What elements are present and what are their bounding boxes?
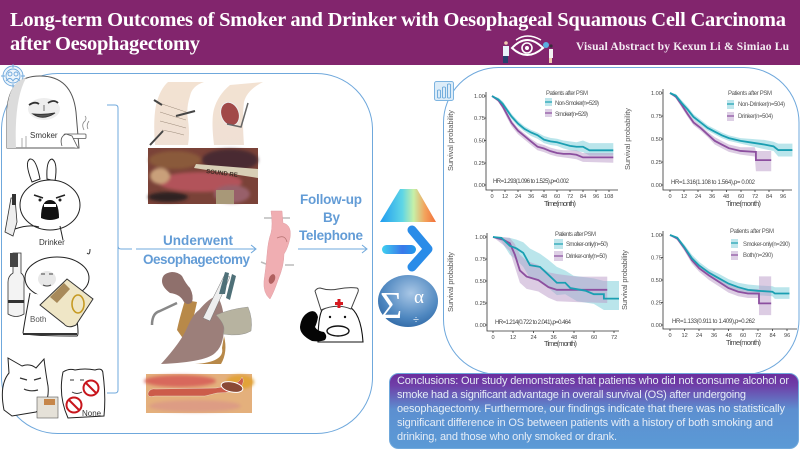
panel: methods <box>1 64 372 434</box>
label: underwent oesophagectomy: Underwent <box>163 233 234 248</box>
chart: smoker-only vs both: 0.25 <box>651 300 662 306</box>
chart: smokers vs non-smokers: 72 <box>567 194 573 200</box>
legend: Patients after PSM <box>730 229 774 235</box>
chart: smokers vs non-smokers: 12 <box>502 194 508 200</box>
chart: smoker-only vs drinker-only: 24 <box>530 335 537 341</box>
legend: Patients after PSM <box>546 91 588 97</box>
label: underwent oesophagectomy <box>143 233 250 267</box>
character: smoker <box>7 76 89 148</box>
chart: smoker-only vs drinker-only <box>446 232 619 348</box>
label: follow-up by telephone <box>299 192 363 243</box>
character: both <box>8 249 93 336</box>
chart: smokers vs non-smokers: 0.25 <box>474 161 485 167</box>
icon: sigma alpha app: ÷ <box>413 314 419 326</box>
icon: prism app <box>380 189 436 222</box>
x axis label: Time(month) <box>726 199 761 208</box>
chart: drinkers vs non-drinkers: 96 <box>780 194 786 200</box>
legend: Smoker(n=529) <box>555 112 588 118</box>
photo: resected specimen <box>144 374 254 413</box>
y axis label: Survival probability <box>446 110 455 171</box>
legend <box>730 229 790 260</box>
bracket <box>107 105 132 393</box>
legend <box>554 232 608 261</box>
callout: conclusions: smoke had a significant advantage in overall survival (OS) after undergoing <box>397 389 746 401</box>
chart: smokers vs non-smokers: 36 <box>528 194 534 200</box>
chart: drinkers vs non-drinkers: 0.00 <box>651 183 662 189</box>
illustration: stapled stomach and hand <box>152 272 252 364</box>
chart: smokers vs non-smokers: 48 <box>541 194 547 200</box>
legend: Smoker-only(n=290) <box>743 242 790 248</box>
chart: smoker-only vs both: 0.75 <box>651 256 662 262</box>
chart: smoker-only vs drinker-only: 48 <box>571 335 577 341</box>
icon: sigma alpha app: α <box>414 287 424 308</box>
chart: smokers vs non-smokers: 108 <box>604 194 613 200</box>
chart: smokers vs non-smokers: 96 <box>593 194 599 200</box>
chart: smoker-only vs drinker-only: 0.00 <box>475 323 486 329</box>
legend: Patients after PSM <box>728 91 772 97</box>
chart: drinkers vs non-drinkers: 0.25 <box>651 160 662 166</box>
chart: smoker-only vs both: 72 <box>755 333 761 339</box>
y axis label: Survival probability <box>446 252 455 312</box>
label: both: Both <box>30 315 46 324</box>
label: none: None <box>82 409 102 418</box>
x axis label: Time(month) <box>544 199 576 208</box>
hazard ratio: HR=1.316(1.108 to 1.564),p= 0.002 <box>671 180 756 186</box>
chart: drinkers vs non-drinkers: 24 <box>695 194 701 200</box>
chart: drinkers vs non-drinkers: 0 <box>668 194 672 200</box>
title: Long-term Outcomes of Smoker and Drinker with Oesophageal Squamous Cell Carcinoma <box>10 9 786 31</box>
chart: smokers vs non-smokers: 0.50 <box>474 138 485 144</box>
chart: smokers vs non-smokers: 0.75 <box>474 116 485 122</box>
callout: conclusions <box>390 374 798 448</box>
chart: smokers vs non-smokers: 24 <box>515 194 521 200</box>
legend: Non-Drinker(n=504) <box>738 102 785 108</box>
callout: conclusions: significant difference in OS between patients with a history of both smoking and <box>397 417 773 429</box>
label: follow-up by telephone: By <box>323 210 340 225</box>
x axis label: Time(month) <box>726 338 761 347</box>
chart: drinkers vs non-drinkers: 0.50 <box>651 137 662 143</box>
chart: smoker-only vs both: 0.50 <box>651 278 662 284</box>
legend <box>727 91 785 121</box>
y axis label: Survival probability <box>623 108 632 170</box>
chart: smoker-only vs drinker-only: 72 <box>611 335 617 341</box>
chart: smoker-only vs both: 60 <box>740 333 746 339</box>
chart: smoker-only vs drinker-only: 60 <box>591 335 597 341</box>
chart: smokers vs non-smokers: 84 <box>580 194 586 200</box>
callout: conclusions: drinking, and those who only smoked or drank. <box>397 431 617 443</box>
icon: bar chart badge <box>434 82 454 100</box>
chart: smoker-only vs drinker-only: 0.25 <box>475 301 486 307</box>
illustration: thoracic ports <box>150 82 263 145</box>
legend: Both(n=290) <box>743 253 773 259</box>
chart: smoker-only vs both: 36 <box>711 333 717 339</box>
chart: smoker-only vs both: 1.00 <box>651 233 662 239</box>
y axis label: Survival probability <box>620 250 629 310</box>
chart: smoker-only vs drinker-only: 1.00 <box>475 235 486 241</box>
chart: drinkers vs non-drinkers: 36 <box>709 194 715 200</box>
label: smoker: Smoker <box>30 131 58 140</box>
chart: drinkers vs non-drinkers: 12 <box>681 194 687 200</box>
character: none <box>2 358 105 418</box>
illustration: gastric conduit <box>261 211 294 299</box>
chart: smoker-only vs both: 24 <box>696 333 702 339</box>
icon: patients target <box>1 64 25 88</box>
arrow: to follow-up <box>298 245 367 253</box>
character: drinker rabbit <box>5 159 80 247</box>
title: after Oesophagectomy <box>10 33 201 55</box>
chart: smoker-only vs both <box>620 229 797 347</box>
chart: smoker-only vs both: 84 <box>770 333 776 339</box>
label: follow-up by telephone: Follow-up <box>300 192 362 207</box>
chart: smoker-only vs both: 0 <box>668 333 672 339</box>
chart: smokers vs non-smokers: 0 <box>490 194 494 200</box>
photo: thoracoscopic view: SOUND RE <box>206 169 238 179</box>
chart: smoker-only vs both: 0.00 <box>651 323 662 329</box>
chart: smoker-only vs drinker-only: 36 <box>550 335 557 341</box>
icon: eye with doctors <box>503 36 553 63</box>
x axis label: Time(month) <box>544 339 577 348</box>
legend: Drinker-only(n=50) <box>566 254 607 260</box>
label: follow-up by telephone: Telephone <box>299 228 363 243</box>
chart: drinkers vs non-drinkers: 0.75 <box>651 114 662 120</box>
chart: smokers vs non-smokers: 1.00 <box>474 94 485 100</box>
byline: Visual Abstract by Kexun Li & Simiao Lu <box>576 41 790 53</box>
chart: smoker-only vs drinker-only: 12 <box>510 335 516 341</box>
chart: drinkers vs non-drinkers: 60 <box>738 194 744 200</box>
chart: smoker-only vs both: 12 <box>682 333 688 339</box>
legend: Smoker-only(n=50) <box>566 242 608 248</box>
legend <box>545 91 599 118</box>
chart: drinkers vs non-drinkers: 1.00 <box>651 91 662 97</box>
chart: smoker-only vs both: 48 <box>726 333 732 339</box>
callout: conclusions: Conclusions: Our study demonstrates that patients who did not consume alcohol or <box>397 375 789 387</box>
chart: smoker-only vs drinker-only: 0.50 <box>475 279 486 285</box>
legend: Drinker(n=504) <box>738 114 773 120</box>
chart: drinkers vs non-drinkers: 48 <box>723 194 729 200</box>
chart: smokers vs non-smokers: 0.00 <box>474 183 485 189</box>
icon: sigma alpha app <box>378 275 438 327</box>
label: drinker: Drinker <box>39 238 65 247</box>
chart: drinkers vs non-drinkers: 72 <box>752 194 758 200</box>
icon: forward arrow app <box>382 230 428 267</box>
photo: thoracoscopic view <box>148 148 258 204</box>
hazard ratio: HR=1.214(0.722 to 2.041),p=0.464 <box>495 320 572 326</box>
hazard ratio: HR=1.293(1.096 to 1.525),p=0.002 <box>493 179 570 185</box>
title <box>10 9 786 55</box>
legend: Non-Smoker(n=529) <box>555 101 599 107</box>
chart: smoker-only vs drinker-only: 0 <box>492 335 495 341</box>
hazard ratio: HR=1.133(0.911 to 1.409),p=0.262 <box>672 319 756 325</box>
chart: smokers vs non-smokers: 60 <box>554 194 560 200</box>
label: underwent oesophagectomy: Oesophagectomy <box>143 252 250 267</box>
panel: survival results <box>434 68 799 374</box>
character: nurse on telephone <box>300 288 363 342</box>
legend: Patients after PSM <box>555 232 596 238</box>
callout: conclusions: oesophagectomy. Furthermore, our findings indicate that there was no statistically <box>397 403 786 415</box>
icon: prohibition signs <box>66 380 98 412</box>
header banner <box>0 0 800 65</box>
chart: smoker-only vs drinker-only: 0.75 <box>475 257 486 263</box>
icon: sigma alpha app: Σ <box>380 285 402 327</box>
arrow: to surgery <box>136 245 256 253</box>
chart: smokers vs non-smokers <box>446 91 618 208</box>
chart: drinkers vs non-drinkers <box>623 89 792 208</box>
chart: drinkers vs non-drinkers: 84 <box>766 194 772 200</box>
chart: smoker-only vs both: 96 <box>784 333 790 339</box>
